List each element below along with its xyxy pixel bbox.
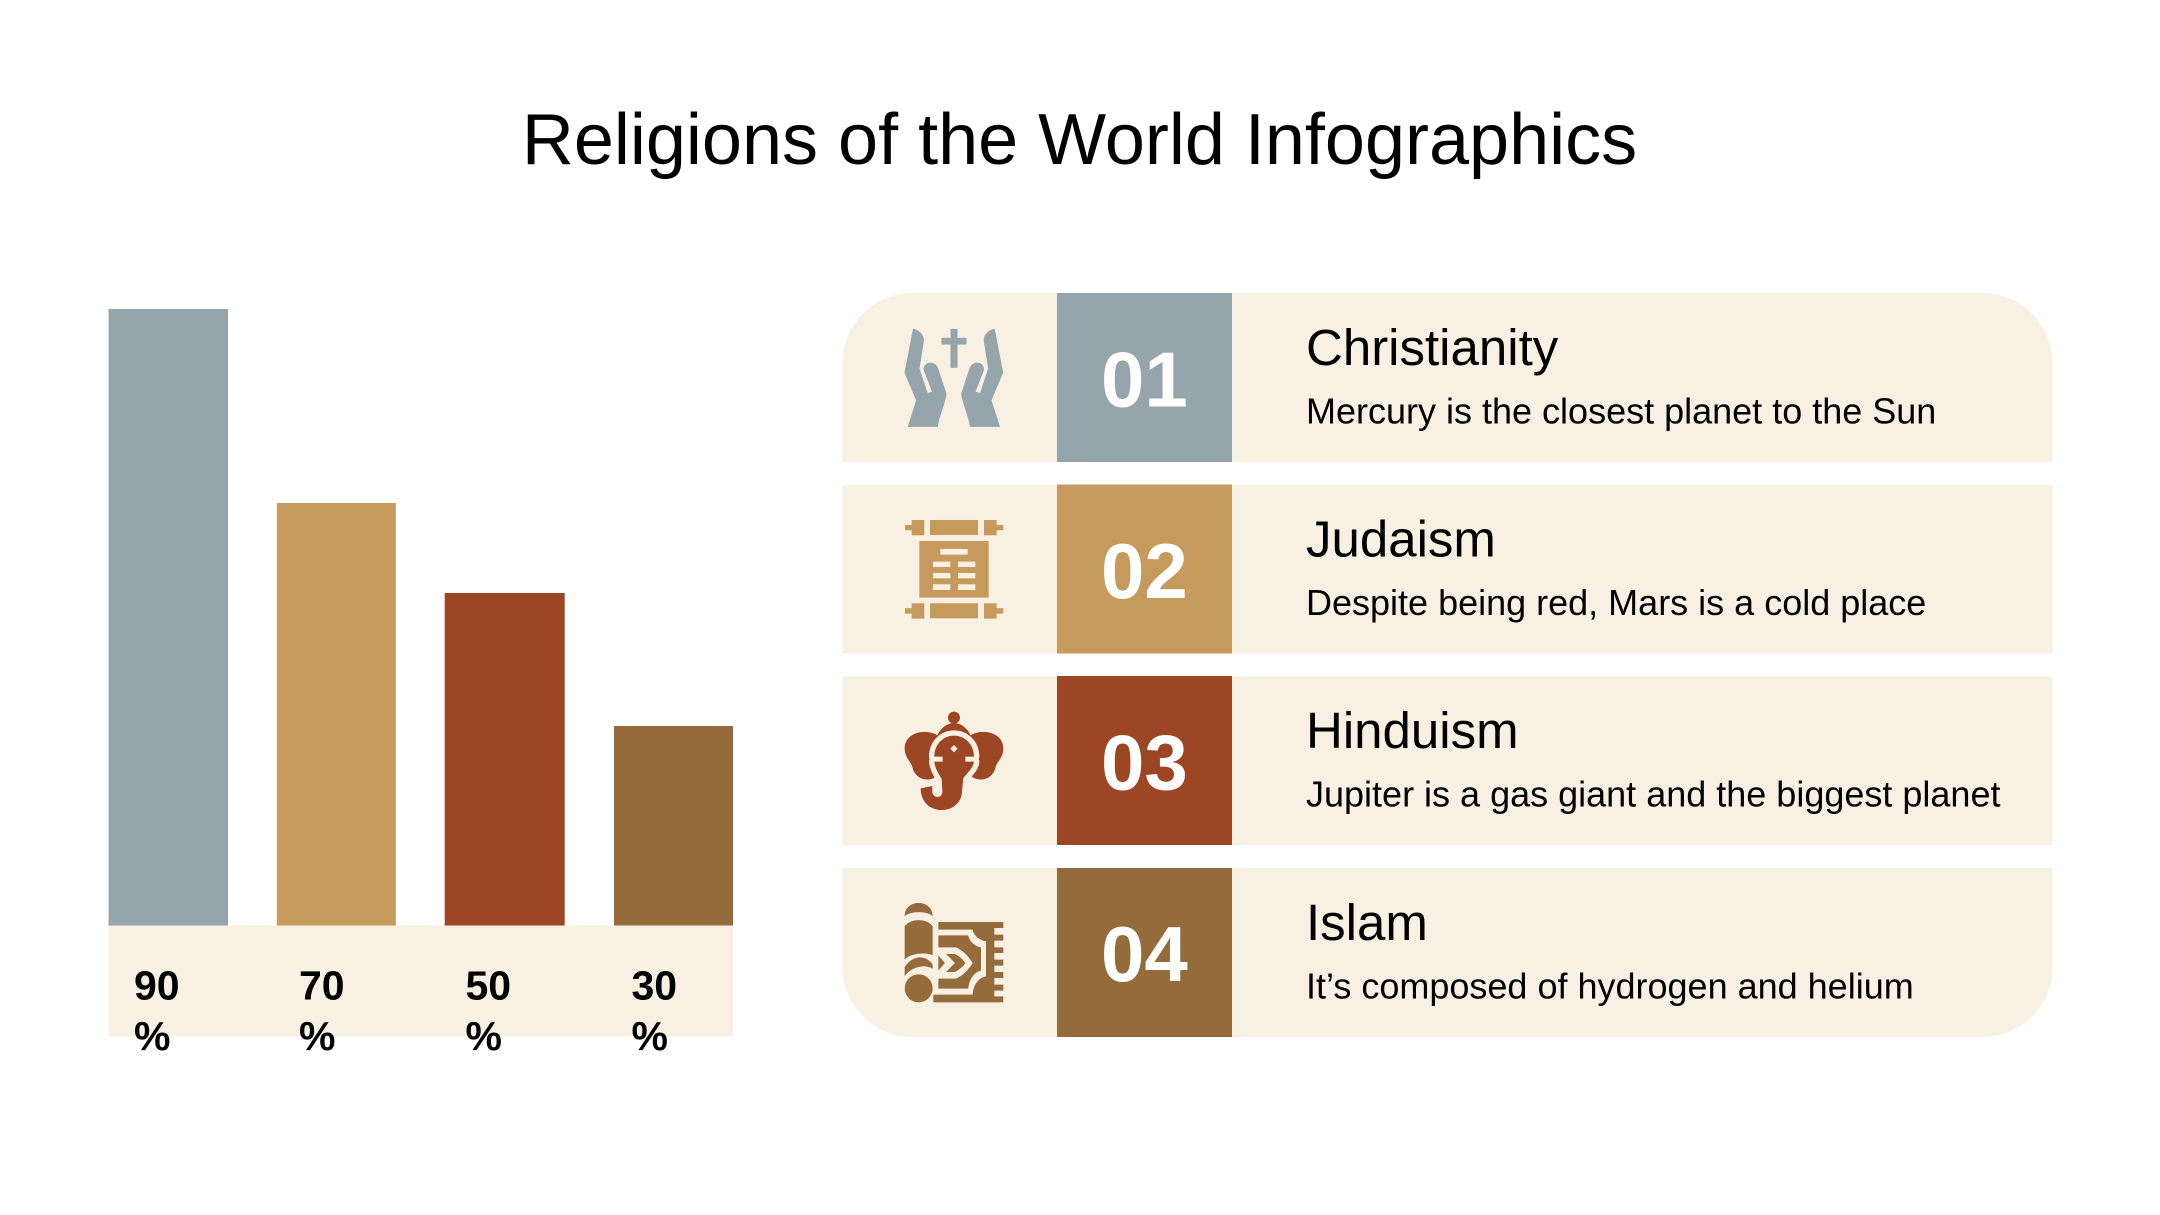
value: 30%: % — [632, 1013, 668, 1059]
title: Religions of the World Infographics — [522, 100, 1637, 180]
panel: Christianity — [842, 293, 2052, 462]
number box 03 — [1057, 676, 1232, 845]
label strip — [108, 926, 733, 1036]
icon: torah scroll — [905, 520, 1003, 619]
icon: elephant head — [905, 712, 1003, 810]
bar: 30% — [614, 726, 733, 926]
value: 50%: % — [466, 1013, 502, 1059]
number 03: 03 — [1101, 718, 1188, 806]
value: 90%: % — [134, 1013, 170, 1059]
number box 01 — [1057, 293, 1232, 462]
value: 90%: 90 — [134, 962, 180, 1008]
name: Judaism — [1306, 510, 1496, 568]
value: 30%: 30 — [632, 962, 677, 1008]
row background — [842, 868, 2052, 1037]
bar: 50% — [445, 593, 565, 926]
number 01: 01 — [1101, 336, 1188, 424]
number box 02 — [1057, 484, 1232, 654]
description: Jupiter is a gas giant and the biggest planet — [1306, 774, 2000, 814]
panel: Islam — [842, 868, 2052, 1037]
row background — [842, 485, 2052, 654]
name: Hinduism — [1306, 702, 1519, 759]
name: Christianity — [1306, 319, 1559, 376]
value: 70%: 70 — [299, 962, 345, 1008]
bar chart — [108, 309, 733, 1059]
value: 70%: % — [299, 1013, 335, 1059]
bar: 90% — [108, 309, 228, 926]
number 02: 02 — [1101, 527, 1188, 615]
description: It’s composed of hydrogen and helium — [1306, 966, 1914, 1006]
description: Mercury is the closest planet to the Sun — [1306, 390, 1936, 432]
name: Islam — [1306, 894, 1428, 951]
panel: Hinduism — [842, 676, 2052, 845]
row background — [842, 676, 2052, 845]
number 04: 04 — [1101, 910, 1188, 998]
bar: 70% — [277, 503, 396, 926]
row background — [842, 293, 2052, 462]
value: 50%: 50 — [466, 962, 511, 1008]
icon: prayer rug — [905, 903, 1003, 1002]
panel: Judaism — [842, 484, 2052, 654]
icon: praying hands with cross — [905, 329, 1003, 426]
number box 04 — [1057, 868, 1232, 1037]
description: Despite being red, Mars is a cold place — [1306, 582, 1926, 623]
